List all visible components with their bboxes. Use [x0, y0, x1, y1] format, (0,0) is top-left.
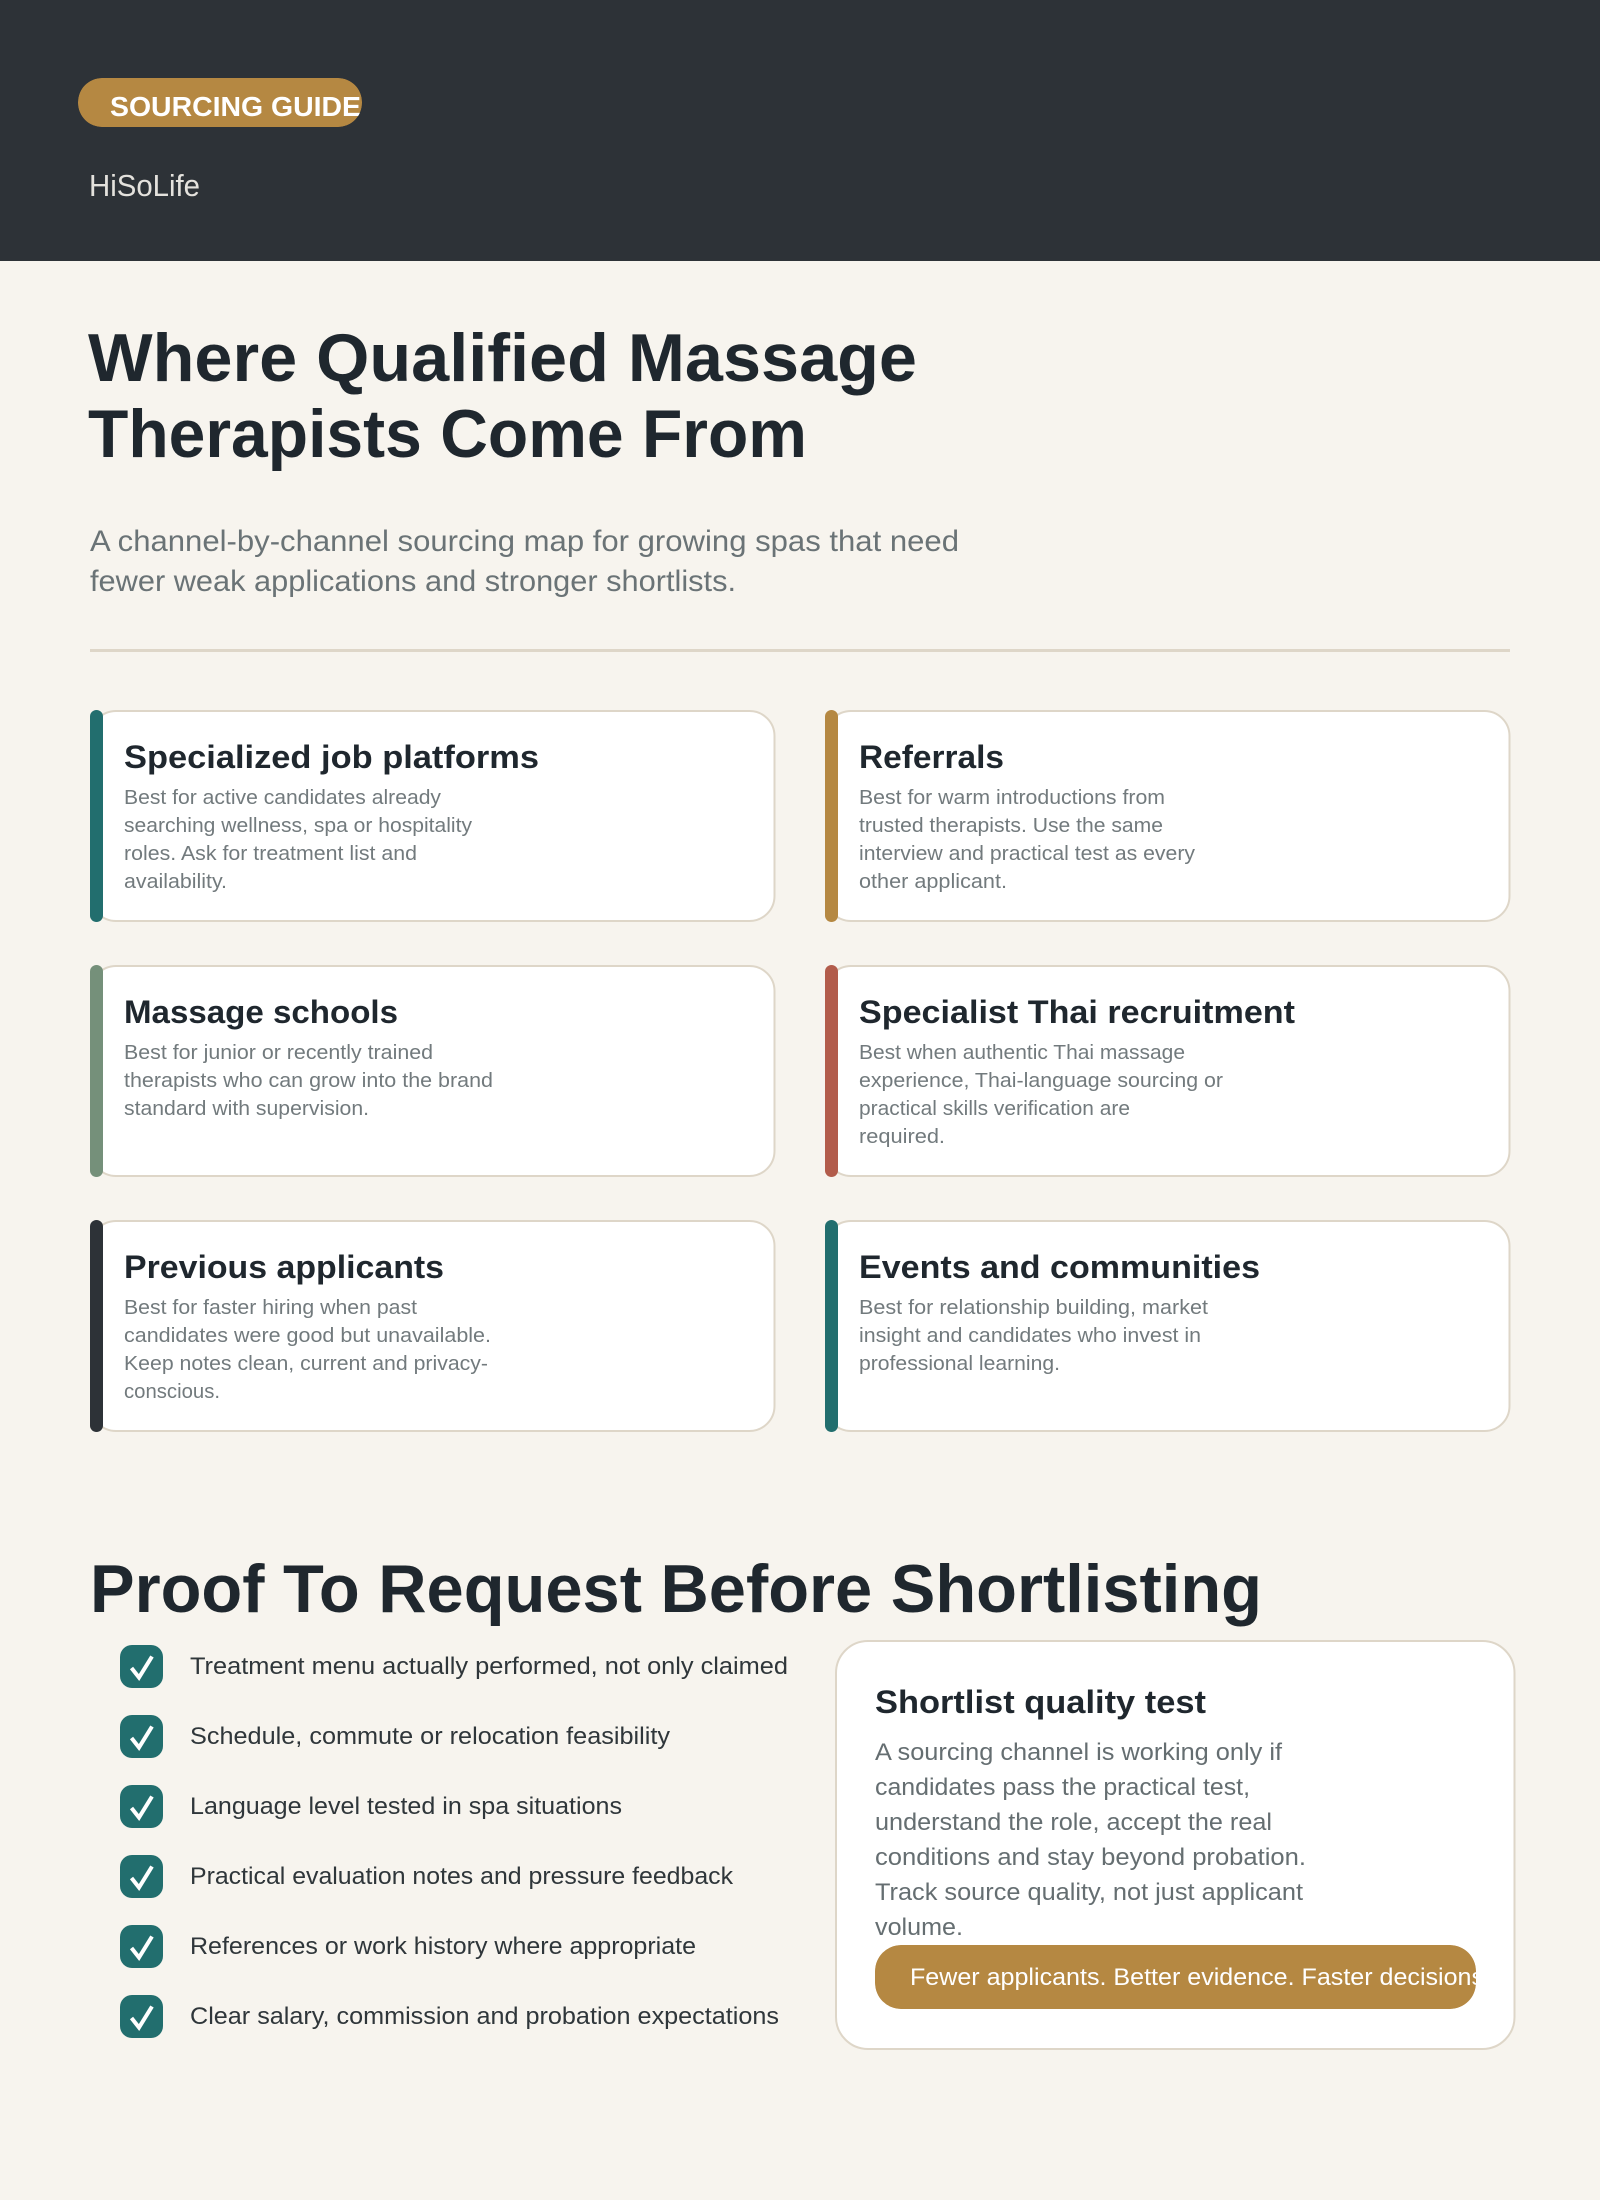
card heading: Specialized job platforms — [124, 739, 539, 775]
header band — [0, 0, 1600, 261]
panel: shortlist quality test — [836, 1641, 1514, 2049]
card description: conscious. — [124, 1380, 220, 1403]
check item 5 — [120, 1925, 696, 1968]
card: massage schools — [90, 965, 774, 1177]
section heading: Proof To Request Before Shortlisting — [90, 1551, 1262, 1627]
card description: professional learning. — [859, 1352, 1060, 1375]
brand name: HiSoLife — [89, 168, 200, 203]
card heading: Previous applicants — [124, 1249, 444, 1285]
card description: insight and candidates who invest in — [859, 1324, 1201, 1347]
check item 1: Treatment menu actually performed, not only claimed — [190, 1653, 788, 1680]
card heading: Specialist Thai recruitment — [859, 994, 1295, 1030]
panel text — [875, 1739, 1306, 1941]
subtitle — [90, 525, 959, 598]
card description: therapists who can grow into the brand — [124, 1069, 493, 1092]
panel text: volume. — [875, 1914, 963, 1941]
card description: interview and practical test as every — [859, 842, 1196, 865]
check item 6 — [120, 1995, 779, 2038]
check item 3 — [120, 1785, 622, 1828]
panel text: Track source quality, not just applicant — [875, 1879, 1303, 1906]
card description: Keep notes clean, current and privacy- — [124, 1352, 488, 1375]
card: referrals — [825, 710, 1510, 922]
card: specialist thai recruitment — [825, 965, 1510, 1177]
badge: sourcing guide — [78, 78, 362, 127]
title — [88, 320, 917, 472]
card description: Best for relationship building, market — [859, 1296, 1208, 1319]
card description: other applicant. — [859, 870, 1007, 893]
check item 5: References or work history where appropriate — [190, 1933, 696, 1960]
card description: roles. Ask for treatment list and — [124, 842, 417, 865]
panel text: candidates pass the practical test, — [875, 1774, 1250, 1801]
check item 2 — [120, 1715, 670, 1758]
card heading: Referrals — [859, 739, 1004, 775]
panel text: A sourcing channel is working only if — [875, 1739, 1282, 1766]
check item 3: Language level tested in spa situations — [190, 1793, 622, 1820]
card description: availability. — [124, 870, 227, 893]
subtitle: A channel-by-channel sourcing map for growing spas that need — [90, 525, 959, 558]
check item 6: Clear salary, commission and probation expectations — [190, 2003, 779, 2030]
title: Where Qualified Massage — [88, 320, 917, 396]
panel text: conditions and stay beyond probation. — [875, 1844, 1306, 1871]
card description: candidates were good but unavailable. — [124, 1324, 491, 1347]
check item 1 — [120, 1645, 788, 1688]
card description — [124, 786, 473, 893]
subtitle: fewer weak applications and stronger shortlists. — [90, 565, 736, 598]
card description: Best for active candidates already — [124, 786, 442, 809]
card description — [124, 1041, 493, 1120]
card heading: Massage schools — [124, 994, 398, 1030]
card description: experience, Thai-language sourcing or — [859, 1069, 1223, 1092]
card description — [124, 1296, 491, 1403]
card description: standard with supervision. — [124, 1097, 369, 1120]
card description: Best for warm introductions from — [859, 786, 1165, 809]
panel text: understand the role, accept the real — [875, 1809, 1272, 1836]
card description: trusted therapists. Use the same — [859, 814, 1163, 837]
panel heading: Shortlist quality test — [875, 1684, 1206, 1720]
badge: sourcing guide: SOURCING GUIDE — [110, 91, 361, 122]
accent bar — [825, 710, 838, 922]
callout pill — [875, 1945, 1491, 2009]
card: previous applicants — [90, 1220, 774, 1432]
card description — [859, 786, 1196, 893]
accent bar — [90, 710, 103, 922]
callout pill: Fewer applicants. Better evidence. Faster decisions. — [910, 1964, 1491, 1991]
card: events and communities — [825, 1220, 1510, 1432]
accent bar — [90, 1220, 103, 1432]
checklist — [120, 1645, 788, 2038]
card description: Best for faster hiring when past — [124, 1296, 417, 1319]
check item 2: Schedule, commute or relocation feasibility — [190, 1723, 670, 1750]
check item 4: Practical evaluation notes and pressure feedback — [190, 1863, 734, 1890]
card description — [859, 1041, 1223, 1148]
card description: required. — [859, 1125, 945, 1148]
card description: practical skills verification are — [859, 1097, 1130, 1120]
accent bar — [825, 965, 838, 1177]
card description: searching wellness, spa or hospitality — [124, 814, 473, 837]
title: Therapists Come From — [88, 396, 807, 472]
check item 4 — [120, 1855, 734, 1898]
card description: Best for junior or recently trained — [124, 1041, 433, 1064]
accent bar — [825, 1220, 838, 1432]
card description — [859, 1296, 1208, 1375]
accent bar — [90, 965, 103, 1177]
card: specialized job platforms — [90, 710, 774, 922]
card description: Best when authentic Thai massage — [859, 1041, 1185, 1064]
card heading: Events and communities — [859, 1249, 1260, 1285]
